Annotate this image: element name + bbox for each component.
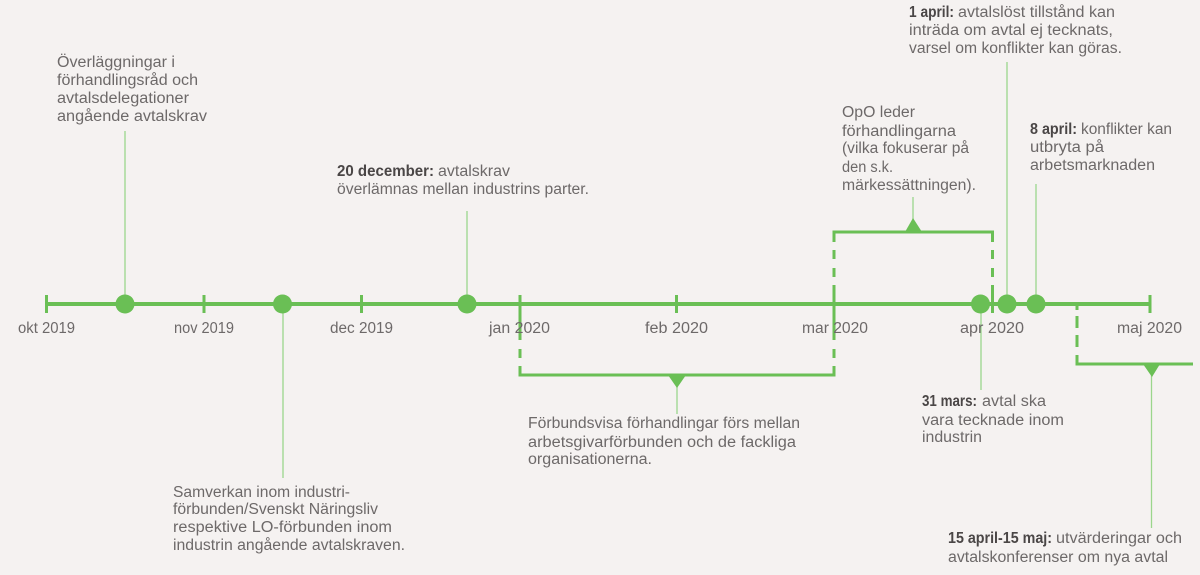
text: samverkan: förbunden/Svenskt Näringsliv [173,501,378,518]
text: 15 april-15 maj: avtalskonferenser om nya avtal [948,549,1168,566]
text: 15 april-15 maj [948,530,1182,566]
text: 8 april: konflikter kan [1081,121,1172,138]
month labels: nov 2019 [174,320,234,337]
timeline axis [46,295,1150,313]
text: 8 april: utbryta på [1030,139,1104,156]
text: samverkan: industrin angående avtalskraven. [173,537,405,554]
bracket: förbundsvisa förhandlingar [520,295,834,388]
month labels: feb 2020 [645,320,708,337]
text: samverkan: respektive LO-förbunden inom [173,519,392,536]
bracket: utvärderingar [1077,305,1193,377]
month labels: okt 2019 [18,320,75,337]
event markers [116,294,1046,314]
text: överläggningar: angående avtalskrav [57,108,207,125]
text: 31 mars [922,393,1064,446]
month labels: jan 2020 [488,320,550,337]
text: förbundsvisa förhandlingar: arbetsgivarförbunden och de fackliga [528,434,796,451]
bracket: OpO leder [834,218,992,313]
text: överläggningar [57,53,207,125]
text: 1 april: avtalslöst tillstånd kan [958,4,1115,21]
text: 8 april: arbetsmarknaden [1030,157,1155,174]
text: förbundsvisa förhandlingar [528,415,800,468]
text: 1 april [909,4,1122,57]
text: förbundsvisa förhandlingar: organisationerna. [528,451,652,468]
text: 20 december [337,163,589,198]
text: förbundsvisa förhandlingar: Förbundsvisa förhandlingar förs mellan [528,415,800,432]
text: 8 april: 8 april: [1030,121,1077,138]
month labels: maj 2020 [1117,320,1182,337]
text: 31 mars: industrin [922,429,982,446]
connector lines [125,62,1152,528]
text: överläggningar: förhandlingsråd och [57,72,198,89]
text: 31 mars: avtal ska [982,393,1046,410]
text: 20 december: 20 december: [337,163,434,180]
month labels: mar 2020 [802,320,868,337]
month labels: apr 2020 [960,320,1024,337]
text: 20 december: överlämnas mellan industrins parter. [337,181,589,198]
text: 8 april [1030,121,1172,174]
text: OpO leder: märkessättningen). [842,177,976,194]
text: OpO leder: (vilka fokuserar på [842,140,969,157]
text: överläggningar: avtalsdelegationer [57,90,189,107]
text: 15 april-15 maj: utvärderingar och [1056,530,1182,547]
text: OpO leder: förhandlingarna [842,123,956,140]
text: samverkan [173,484,405,554]
text: samverkan: Samverkan inom industri- [173,484,350,501]
text: 20 december: avtalskrav [438,163,510,180]
text: överläggningar: Överläggningar i [57,53,175,71]
text: OpO leder [842,104,976,194]
month labels: dec 2019 [330,320,393,337]
text: 15 april-15 maj: 15 april-15 maj: [948,530,1052,547]
month labels [18,320,1182,337]
text: 1 april: 1 april: [909,4,954,21]
text: 1 april: inträda om avtal ej tecknats, [909,22,1113,39]
text: 31 mars: 31 mars: [922,393,977,410]
text: 1 april: varsel om konflikter kan göras. [909,40,1122,57]
text: OpO leder: den s.k. [842,159,893,176]
text: OpO leder: OpO leder [842,104,915,121]
text: 31 mars: vara tecknade inom [922,412,1064,429]
